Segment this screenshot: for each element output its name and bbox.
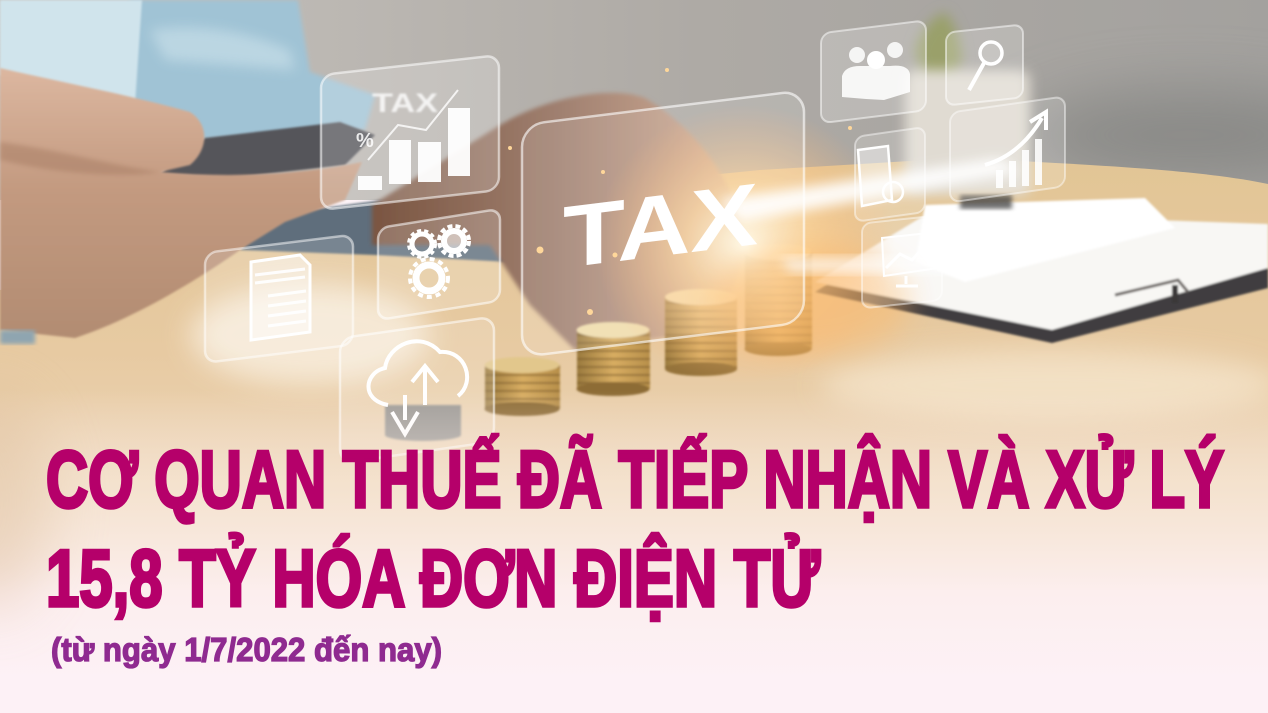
icon panel: magnifier [946, 24, 1023, 106]
left hand [0, 68, 362, 338]
icon panel: tax chart: % [356, 130, 374, 152]
icon panel: cloud [340, 317, 494, 463]
icon panel: tax chart [321, 55, 499, 210]
bottom fade to pink [0, 390, 1268, 680]
dark shadow under hand [240, 200, 520, 262]
plant [915, 12, 962, 85]
icon panel: people [821, 20, 926, 123]
icon panel: growth arrow [950, 96, 1065, 202]
icon panel: tax chart: TAX [372, 88, 438, 118]
phone [160, 122, 375, 178]
icon panel: big TAX [522, 90, 804, 357]
blue strip under hand [0, 330, 35, 344]
shirt [130, 0, 375, 140]
table highlights [190, 285, 430, 385]
subtitle: (từ ngày 1/7/2022 đến nay) [51, 631, 442, 668]
icon panel: small chart [862, 215, 942, 308]
title line 2: 15,8 TỶ HÓA ĐƠN ĐIỆN TỬ [46, 532, 821, 624]
title [46, 434, 1224, 624]
sparkles [508, 68, 852, 315]
coin stack 1 [385, 405, 461, 441]
icon panel: clipboard [855, 127, 925, 222]
right hand behind tax panel [372, 93, 748, 350]
icon panel: gears [378, 209, 500, 320]
icon panel: big TAX: TAX [563, 164, 758, 287]
document on table [815, 195, 1268, 343]
coin stacks [385, 244, 812, 441]
glow [595, 105, 1020, 385]
coin stack 3 [576, 322, 650, 396]
coin stack 5 [744, 244, 812, 356]
coin stack 2 [484, 357, 560, 416]
light streak [720, 158, 1020, 222]
icon panel: document [205, 235, 353, 363]
coin stack 4 [665, 289, 737, 376]
